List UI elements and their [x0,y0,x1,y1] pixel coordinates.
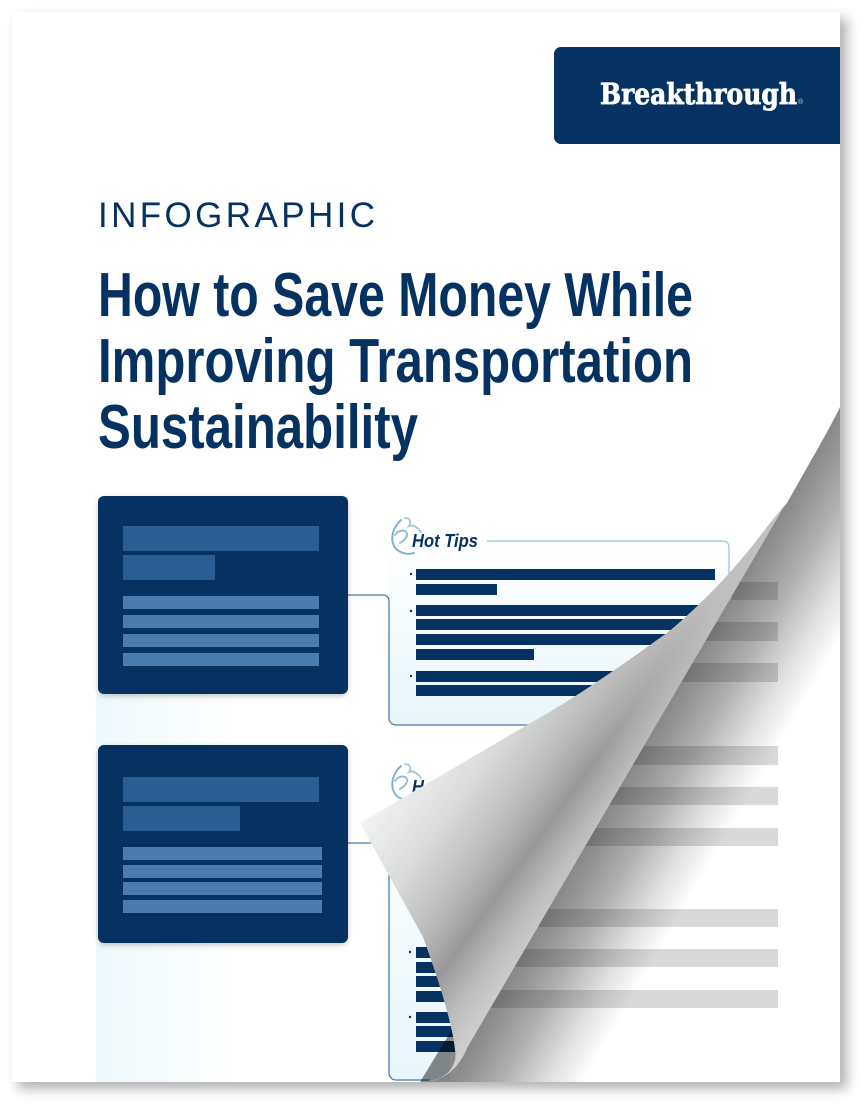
eyebrow label: INFOGRAPHIC [98,196,375,235]
tips text bars [410,569,715,696]
title [98,261,693,462]
background wash: left column [96,690,246,1082]
hot tips heading: Hot Tips [412,777,478,797]
icon: hot tips flame [392,764,421,799]
panel: second navy card [98,745,348,945]
logo block [554,47,840,144]
page curl [360,505,785,1081]
panel: first hot tips card [348,518,729,725]
logo wordmark: ® [798,98,804,106]
title: Improving Transportation [98,327,693,396]
title: How to Save Money While [98,261,693,330]
panel: first navy card [98,496,348,696]
tips text bars [409,947,460,1052]
connector line [348,595,535,725]
connector line [348,843,430,1080]
hot tips heading: Hot Tips [412,531,478,551]
title: Sustainability [98,393,418,462]
page curl cast shadow [420,407,840,1082]
panel: second hot tips card [348,764,478,1080]
logo wordmark: Breakthrough [600,77,797,111]
grey placeholder text lines on page [470,582,778,1008]
icon: hot tips flame [392,518,421,554]
